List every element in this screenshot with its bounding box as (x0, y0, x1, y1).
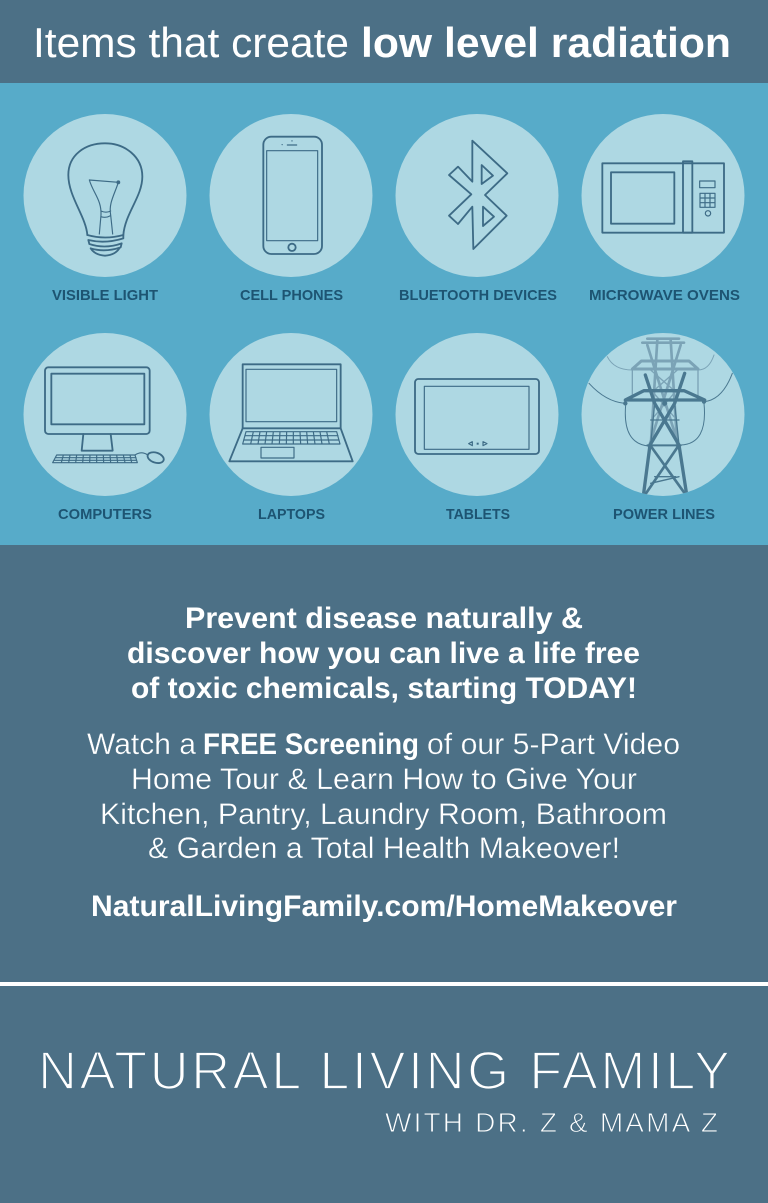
icon: bluetooth (449, 141, 507, 249)
label: TABLETS (446, 506, 510, 523)
body text: Kitchen, Pantry, Laundry Room, Bathroom (100, 798, 667, 831)
label: MICROWAVE OVENS (589, 287, 740, 304)
item: microwave ovens (582, 114, 744, 304)
icon: desktop computer (45, 367, 165, 465)
icon: phone (263, 137, 322, 254)
icon: microwave (602, 161, 724, 233)
label: COMPUTERS (58, 506, 152, 523)
icon: power tower (589, 339, 732, 493)
item: visible light (24, 114, 186, 304)
icon: tablet (415, 379, 539, 454)
label: LAPTOPS (258, 506, 325, 523)
panel: call to action (87, 602, 680, 923)
title: low level radiation (361, 19, 731, 66)
item: power lines (582, 333, 744, 523)
body text (87, 728, 680, 865)
label: BLUETOOTH DEVICES (399, 287, 557, 304)
headline (127, 602, 640, 705)
label: POWER LINES (613, 506, 715, 523)
tagline: WITH DR. Z & MAMA Z (385, 1107, 718, 1138)
label: VISIBLE LIGHT (52, 287, 158, 304)
footer brand (38, 1041, 730, 1138)
url: NaturalLivingFamily.com/HomeMakeover (91, 890, 677, 923)
item: laptops (210, 333, 372, 523)
divider line (0, 982, 768, 986)
label: CELL PHONES (240, 287, 343, 304)
headline: Prevent disease naturally & (185, 602, 583, 635)
headline: discover how you can live a life free (127, 637, 640, 670)
item: bluetooth devices (396, 114, 558, 304)
body text: of our 5-Part Video (427, 728, 680, 761)
icon: laptop (229, 364, 353, 461)
brand name: NATURAL LIVING FAMILY (38, 1041, 730, 1101)
item: cell phones (210, 114, 372, 304)
panel: radiation items (0, 83, 768, 545)
icon: light bulb (68, 143, 142, 256)
body text: & Garden a Total Health Makeover! (148, 832, 620, 865)
item: computers (24, 333, 186, 523)
headline: of toxic chemicals, starting TODAY! (131, 672, 637, 705)
title: Items that create (33, 19, 349, 66)
body text: Watch a (87, 728, 196, 761)
body text: FREE Screening (203, 728, 419, 761)
item: tablets (396, 333, 558, 523)
body text: Home Tour & Learn How to Give Your (131, 763, 637, 796)
